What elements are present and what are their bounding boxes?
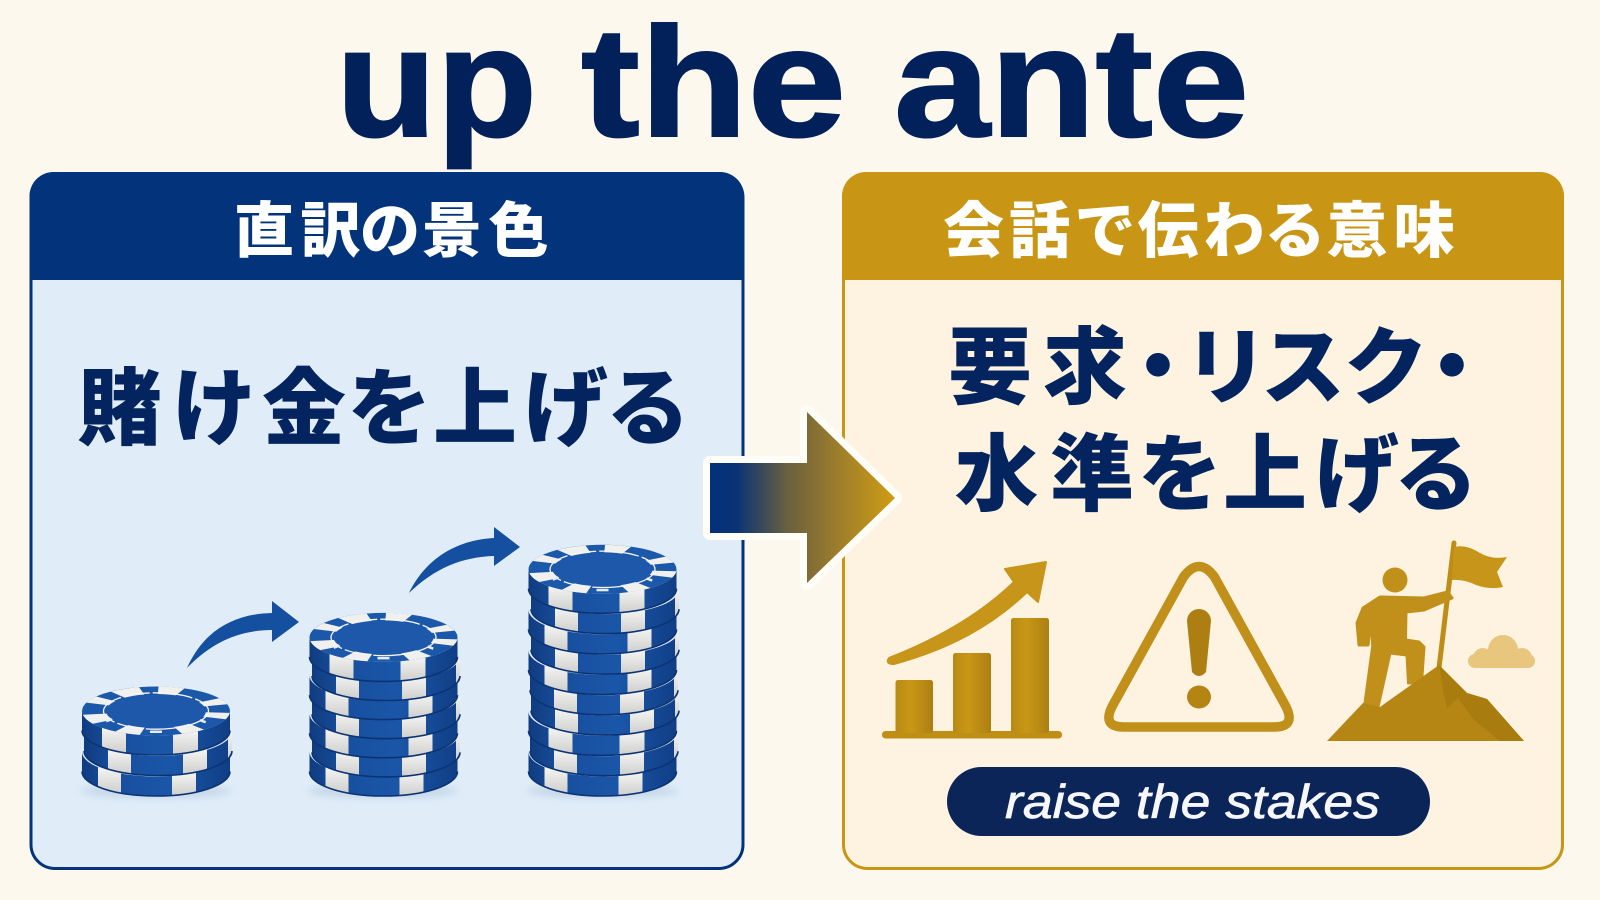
title: ante xyxy=(894,0,1249,170)
arrow: small to medium xyxy=(187,601,299,668)
icon: warning triangle xyxy=(1109,566,1289,727)
panel: literal scene xyxy=(30,172,744,868)
flag xyxy=(1452,546,1507,588)
panel heading: 直訳の景色 xyxy=(234,198,548,265)
callout pill xyxy=(947,767,1430,836)
chip stack: large xyxy=(526,545,679,798)
flag pole xyxy=(1439,543,1454,668)
arrow: medium to large xyxy=(409,527,520,593)
title: the xyxy=(581,0,846,170)
title: up xyxy=(336,0,537,170)
body xyxy=(1357,592,1452,707)
chip stack: medium xyxy=(307,613,460,798)
line 2: 水準を上げる xyxy=(954,428,1478,522)
mountain facet xyxy=(1439,665,1524,741)
icon: rising bar chart xyxy=(882,562,1062,738)
panel header xyxy=(842,172,1564,280)
main phrase: 賭け金を上げる xyxy=(78,362,690,456)
head xyxy=(1382,568,1408,592)
icon: climber with flag on summit xyxy=(1327,543,1535,741)
arrow: literal to meaning xyxy=(710,412,895,583)
meaning phrase xyxy=(948,321,1494,522)
line 1: 要求・リスク・ xyxy=(948,321,1494,415)
panel body xyxy=(844,174,1562,868)
mountain xyxy=(1327,665,1524,741)
chip stack: small xyxy=(80,686,232,798)
callout pill: raise the stakes xyxy=(1005,775,1380,828)
panel: conversational meaning xyxy=(842,172,1564,868)
cloud xyxy=(1468,635,1535,668)
panel heading: 会話で伝わる意味 xyxy=(943,197,1455,265)
panel body xyxy=(31,174,743,868)
panel header xyxy=(30,172,744,280)
